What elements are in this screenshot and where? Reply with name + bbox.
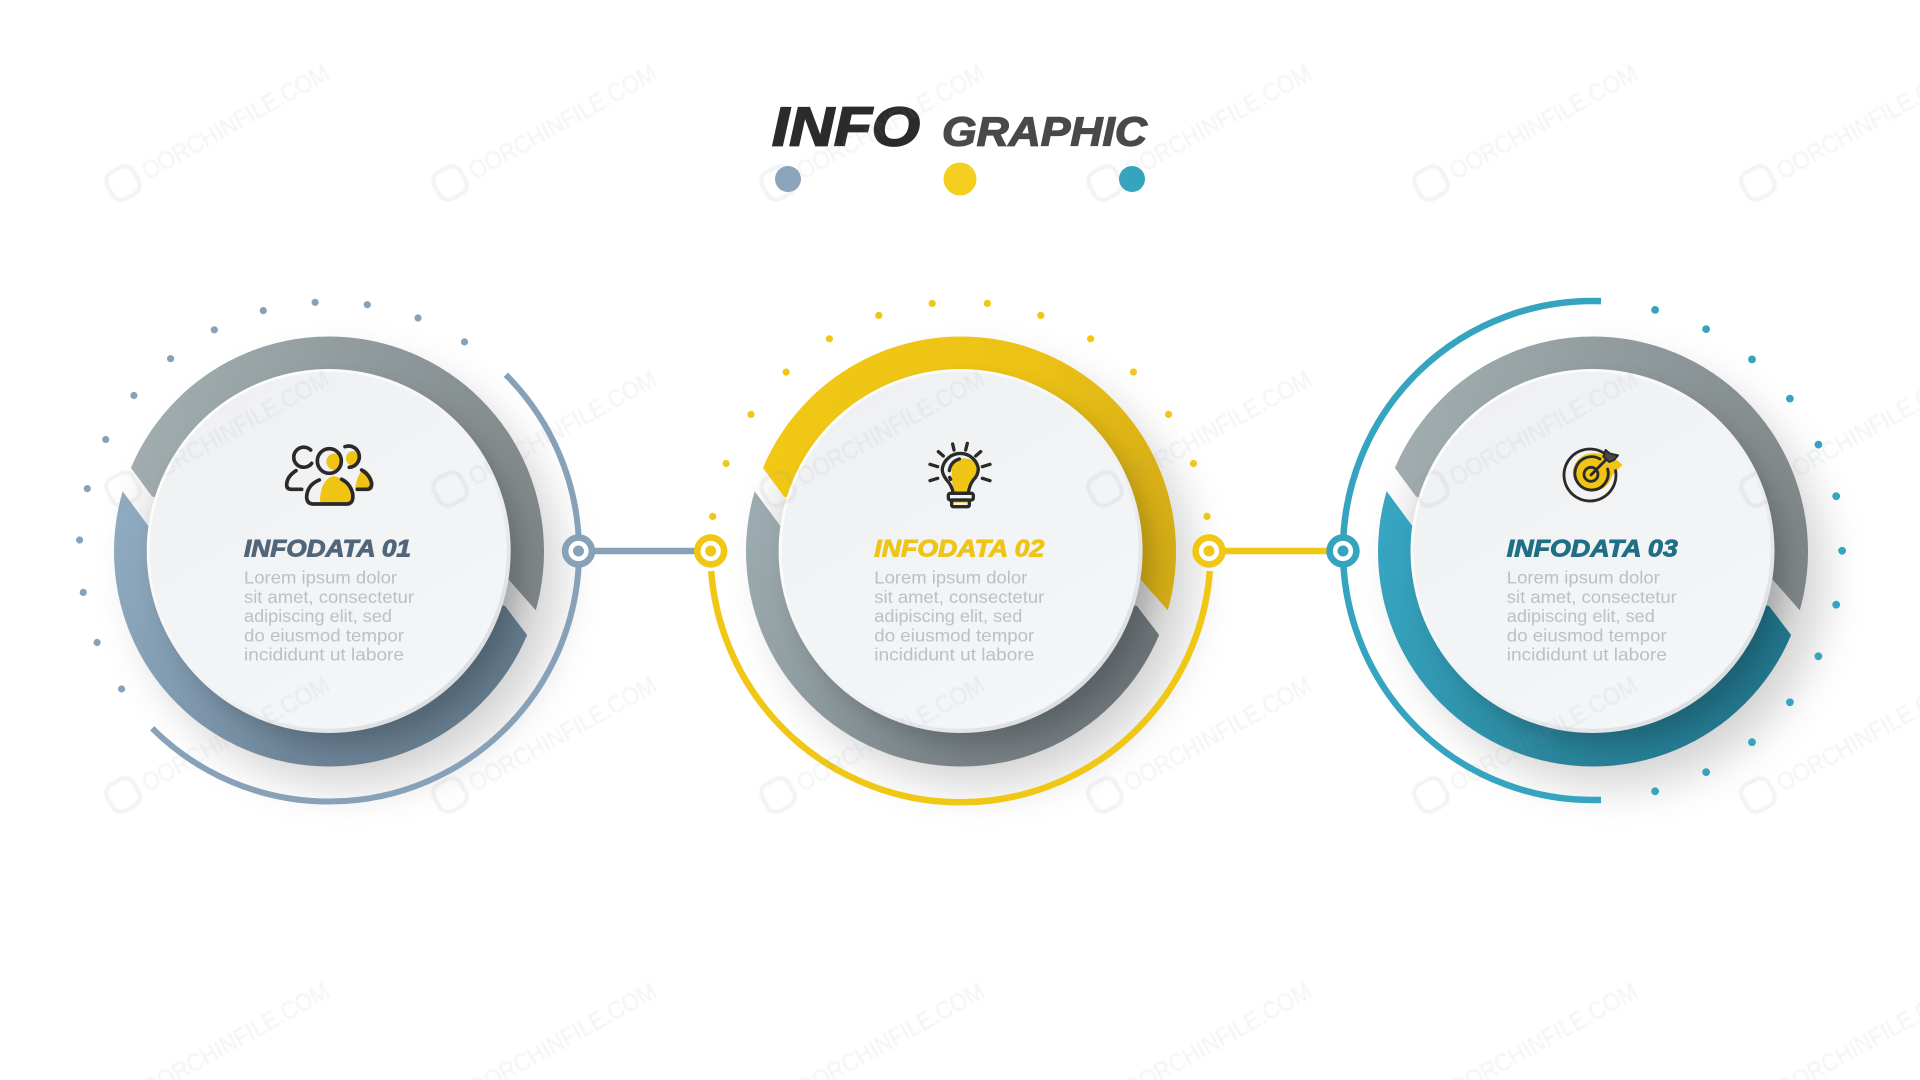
body text 3 bbox=[1507, 568, 1677, 664]
disc 2 bbox=[779, 369, 1143, 733]
panel: step 1 bbox=[76, 299, 579, 802]
watermark pattern: OORCHINFILE.COM bbox=[1445, 671, 1642, 797]
thin arc 3 bbox=[1343, 301, 1601, 800]
node: yellow right bbox=[1196, 538, 1222, 564]
thin arc 2 bbox=[711, 571, 1210, 802]
watermark pattern: OORCHINFILE.COM bbox=[792, 59, 989, 185]
outer shadow 3 bbox=[1401, 363, 1825, 787]
body text 3: Lorem ipsum dolor bbox=[1507, 568, 1660, 588]
body text 2: do eiusmod tempor bbox=[874, 625, 1034, 645]
dotted arc 1 bbox=[76, 299, 468, 693]
node: blue bbox=[565, 538, 592, 564]
watermark pattern: OORCHINFILE.COM bbox=[1119, 59, 1316, 185]
title bbox=[772, 96, 1148, 158]
title colour dots bbox=[775, 162, 1145, 196]
body text 1 bbox=[244, 568, 414, 664]
watermark pattern: OORCHINFILE.COM bbox=[137, 59, 334, 185]
disc shadow 2 bbox=[793, 385, 1153, 745]
body text 3: do eiusmod tempor bbox=[1507, 625, 1667, 645]
ring 3 bbox=[1378, 336, 1808, 766]
outer shadow 2 bbox=[769, 363, 1193, 787]
heading 3: INFODATA 03 bbox=[1507, 536, 1679, 563]
watermark pattern: OORCHINFILE.COM bbox=[464, 365, 661, 491]
body text 2: Lorem ipsum dolor bbox=[874, 568, 1027, 588]
icon: target bbox=[1564, 449, 1623, 501]
watermark pattern: OORCHINFILE.COM bbox=[1445, 365, 1642, 491]
body text 1: do eiusmod tempor bbox=[244, 625, 404, 645]
watermark pattern: OORCHINFILE.COM bbox=[464, 671, 661, 797]
body text 1: sit amet, consectetur bbox=[244, 587, 414, 607]
body text 2: adipiscing elit, sed bbox=[874, 606, 1022, 626]
panel: step 2 bbox=[709, 300, 1211, 802]
body text 3: adipiscing elit, sed bbox=[1507, 606, 1655, 626]
dotted arc 3 bbox=[1651, 306, 1846, 795]
ring 2 bbox=[746, 336, 1176, 766]
thin arc 1 bbox=[152, 375, 579, 802]
body text 2 bbox=[874, 568, 1044, 664]
node: yellow left bbox=[697, 538, 724, 564]
dotted arc 2 bbox=[709, 300, 1211, 520]
body text 2: sit amet, consectetur bbox=[874, 587, 1044, 607]
ring 1 bbox=[114, 336, 544, 766]
disc shadow 3 bbox=[1425, 385, 1785, 745]
watermark pattern: OORCHINFILE.COM bbox=[137, 671, 334, 797]
body text 3: sit amet, consectetur bbox=[1507, 587, 1677, 607]
icon: light bulb bbox=[930, 443, 990, 507]
body text 1: incididunt ut labore bbox=[244, 644, 404, 664]
watermark pattern: OORCHINFILE.COM bbox=[1445, 59, 1642, 185]
title word: GRAPHIC: GRAPHIC bbox=[942, 108, 1148, 154]
watermark pattern: OORCHINFILE.COM bbox=[464, 59, 661, 185]
watermark pattern: OORCHINFILE.COM bbox=[792, 365, 989, 491]
body text 2: incididunt ut labore bbox=[874, 644, 1034, 664]
connector: blue line between step 1 and 2 bbox=[579, 548, 711, 554]
watermark pattern: OORCHINFILE.COM bbox=[1119, 671, 1316, 797]
node: teal bbox=[1330, 538, 1356, 564]
disc 3 bbox=[1410, 369, 1774, 733]
disc 1 bbox=[147, 369, 511, 733]
outer shadow 1 bbox=[137, 363, 561, 787]
title word: INFO: INFO bbox=[772, 96, 920, 158]
body text 3: incididunt ut labore bbox=[1507, 644, 1667, 664]
body text 1: Lorem ipsum dolor bbox=[244, 568, 397, 588]
disc shadow 1 bbox=[161, 385, 521, 745]
watermark pattern: OORCHINFILE.COM bbox=[1119, 365, 1316, 491]
panel: step 3 bbox=[1343, 301, 1846, 800]
connector: yellow line between step 2 and 3 bbox=[1209, 548, 1343, 554]
heading 2: INFODATA 02 bbox=[874, 536, 1045, 563]
watermark pattern: OORCHINFILE.COM bbox=[792, 671, 989, 797]
body text 1: adipiscing elit, sed bbox=[244, 606, 392, 626]
heading 1: INFODATA 01 bbox=[244, 536, 411, 563]
icon: people bbox=[287, 446, 373, 504]
watermark pattern: OORCHINFILE.COM bbox=[137, 365, 334, 491]
